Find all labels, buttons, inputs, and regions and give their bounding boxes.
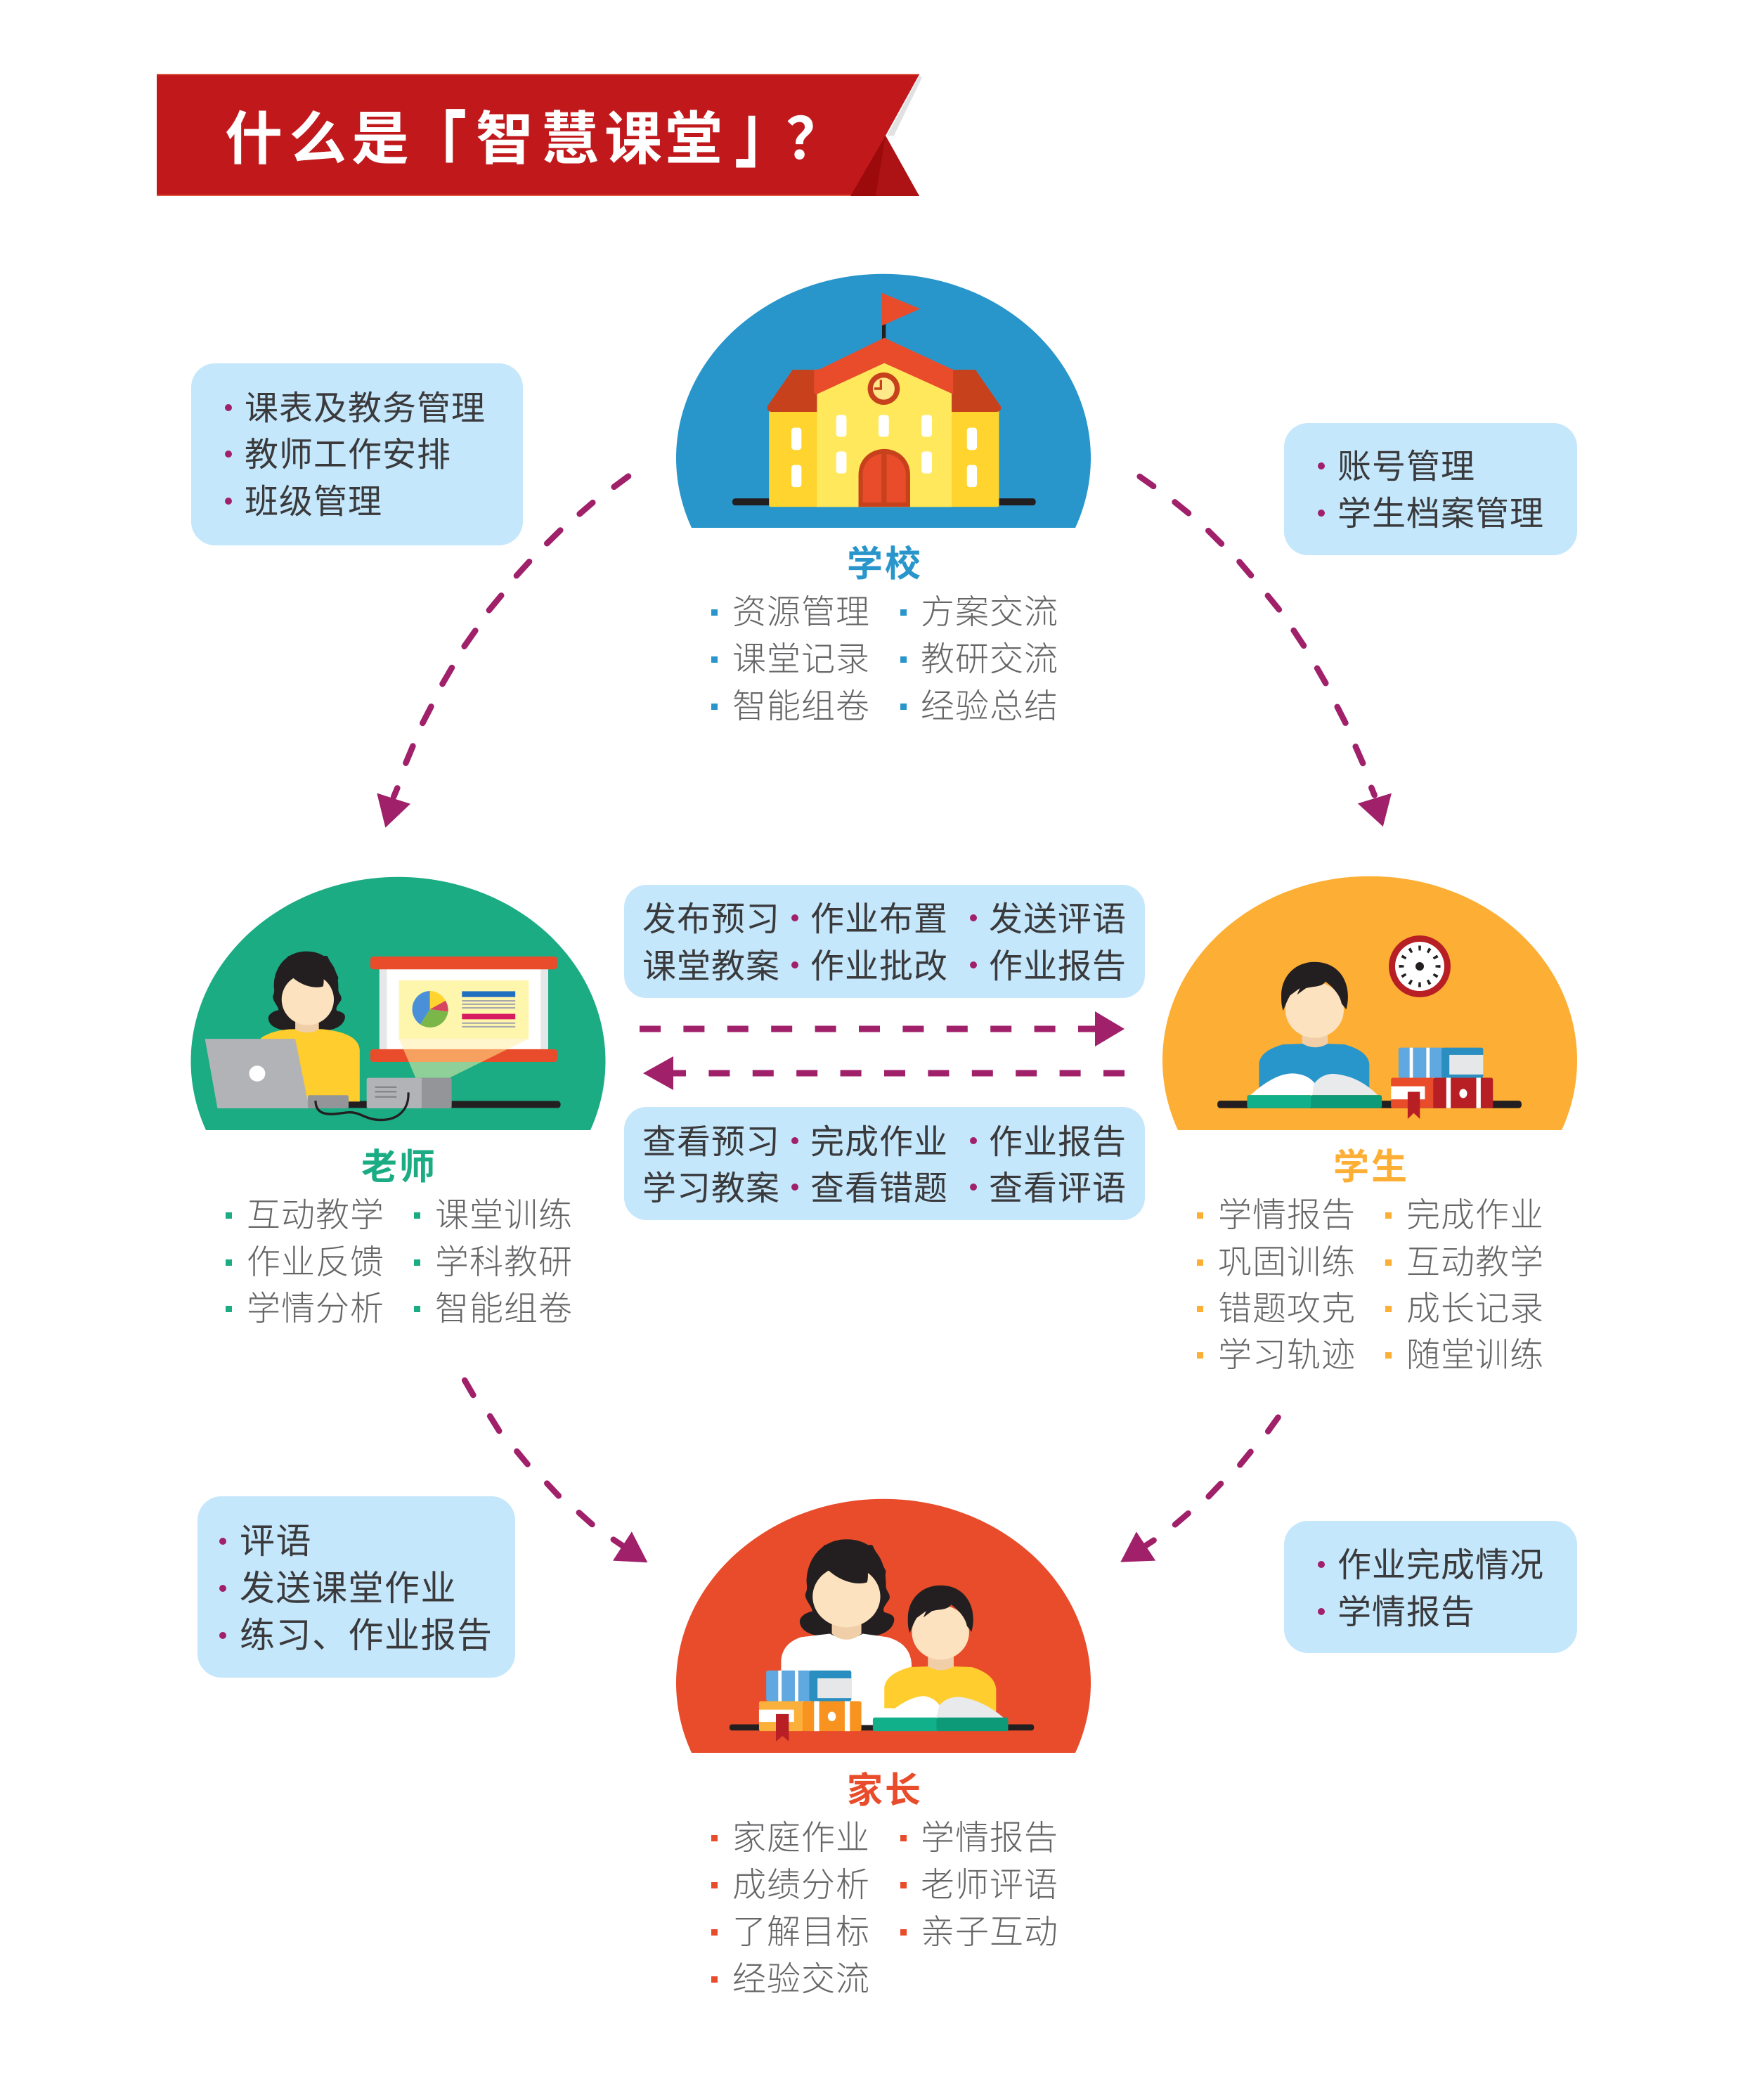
panel: school: [676, 274, 1091, 725]
callout: account management: 账号管理: [1337, 448, 1475, 486]
callout: teacher to parent: 发送课堂作业: [240, 1569, 457, 1608]
arrow: student to parent: [1120, 1418, 1278, 1562]
parent list: 亲子互动: [921, 1914, 1058, 1951]
callout: teacher to school duties: 教师工作安排: [245, 436, 451, 474]
parent heading: 家长: [847, 1770, 923, 1810]
student list: [1197, 1197, 1544, 1374]
teacher list: 作业反馈: [247, 1244, 384, 1281]
callout: teacher to parent: 评语: [240, 1522, 312, 1561]
title banner: [157, 74, 922, 198]
parent dome: [676, 1499, 1091, 1753]
teacher heading: 老师: [361, 1147, 437, 1187]
callout: student to parent: 作业完成情况: [1337, 1547, 1544, 1584]
parent list: 经验交流: [732, 1961, 870, 1998]
parent list: 老师评语: [921, 1867, 1058, 1904]
teacher list: [226, 1197, 573, 1328]
parent list: 成绩分析: [732, 1867, 870, 1904]
student dome: [1162, 876, 1577, 1130]
arrow: teacher to parent: [465, 1380, 647, 1562]
callout: student to teacher functions: 学习教案: [642, 1170, 780, 1207]
icon: teacher with projector: [205, 952, 561, 1120]
student list: 错题攻克: [1218, 1290, 1356, 1328]
title text: 」: [734, 88, 792, 178]
school list: 资源管理: [732, 594, 870, 631]
callout: teacher to student functions: 发布预习: [642, 901, 780, 938]
teacher list: 智能组卷: [435, 1290, 573, 1328]
student list: 巩固训练: [1218, 1244, 1356, 1281]
school list: 方案交流: [921, 594, 1058, 631]
student list: 学情报告: [1218, 1197, 1356, 1234]
callout: account management: 学生档案管理: [1337, 495, 1544, 533]
teacher list: 学情分析: [247, 1290, 384, 1328]
icon: school building: [732, 293, 1036, 507]
school list: 课堂记录: [732, 641, 870, 678]
school list: [711, 594, 1058, 725]
arrow: teacher to student: [640, 1011, 1125, 1046]
callout: teacher to student functions: 课堂教案: [642, 948, 780, 985]
arrow: school to student: [1140, 477, 1392, 827]
parent list: [711, 1820, 1058, 1998]
arrow: student to teacher: [643, 1056, 1125, 1090]
arrow: school to teacher: [377, 477, 628, 828]
callout: teacher to student functions: 发送评语: [989, 901, 1127, 938]
school heading: 学校: [847, 544, 923, 584]
teacher list: 学科教研: [435, 1244, 573, 1281]
icon: wall clock: [1389, 935, 1451, 997]
panel: parent: [676, 1499, 1091, 1998]
title text: [225, 88, 843, 198]
school list: 教研交流: [921, 641, 1058, 678]
callout: teacher to school duties: 课表及教务管理: [245, 390, 486, 427]
school dome: [676, 274, 1091, 528]
callout: teacher to parent: 练习、作业报告: [240, 1616, 493, 1655]
teacher dome: [191, 877, 606, 1130]
callout: teacher to school duties: 班级管理: [245, 484, 382, 521]
student list: 互动教学: [1406, 1244, 1544, 1281]
callout: student to teacher functions: [624, 1107, 1145, 1220]
title text: ？: [786, 108, 843, 171]
callout: teacher to parent: [197, 1496, 515, 1678]
callout: student to teacher functions: 作业报告: [989, 1124, 1127, 1161]
callout: student to teacher functions: 完成作业: [810, 1124, 948, 1161]
teacher list: 课堂训练: [435, 1197, 573, 1234]
panel: teacher: [191, 877, 606, 1328]
callout: teacher to student functions: 作业批改: [810, 948, 948, 985]
parent list: 了解目标: [732, 1914, 870, 1951]
callout: teacher to school duties: [191, 363, 523, 545]
callout: student to teacher functions: 查看预习: [642, 1124, 780, 1161]
callout: account management: [1284, 423, 1577, 555]
parent list: 学情报告: [921, 1820, 1058, 1857]
student list: 随堂训练: [1406, 1337, 1544, 1374]
callout: teacher to student functions: [624, 885, 1145, 998]
title text: 什么是: [225, 108, 409, 171]
school list: 经验总结: [921, 688, 1058, 725]
teacher list: 互动教学: [247, 1197, 384, 1234]
callout: student to teacher functions: 查看评语: [989, 1170, 1127, 1207]
student list: 完成作业: [1406, 1197, 1544, 1234]
title text: 智慧课堂: [476, 108, 723, 171]
panel: student: [1162, 876, 1577, 1374]
callout: teacher to student functions: 作业报告: [989, 948, 1127, 985]
icon: mother and child: [730, 1539, 1034, 1742]
title text: 「: [409, 105, 467, 198]
student heading: 学生: [1333, 1147, 1409, 1187]
student list: 成长记录: [1406, 1290, 1544, 1328]
callout: student to teacher functions: 查看错题: [810, 1170, 948, 1207]
parent list: 家庭作业: [732, 1820, 870, 1857]
callout: student to parent: 学情报告: [1337, 1594, 1475, 1631]
icon: student reading: [1217, 962, 1522, 1119]
callout: student to parent: [1284, 1521, 1577, 1653]
callout: teacher to student functions: 作业布置: [810, 901, 948, 938]
school list: 智能组卷: [732, 688, 870, 725]
student list: 学习轨迹: [1218, 1337, 1356, 1374]
